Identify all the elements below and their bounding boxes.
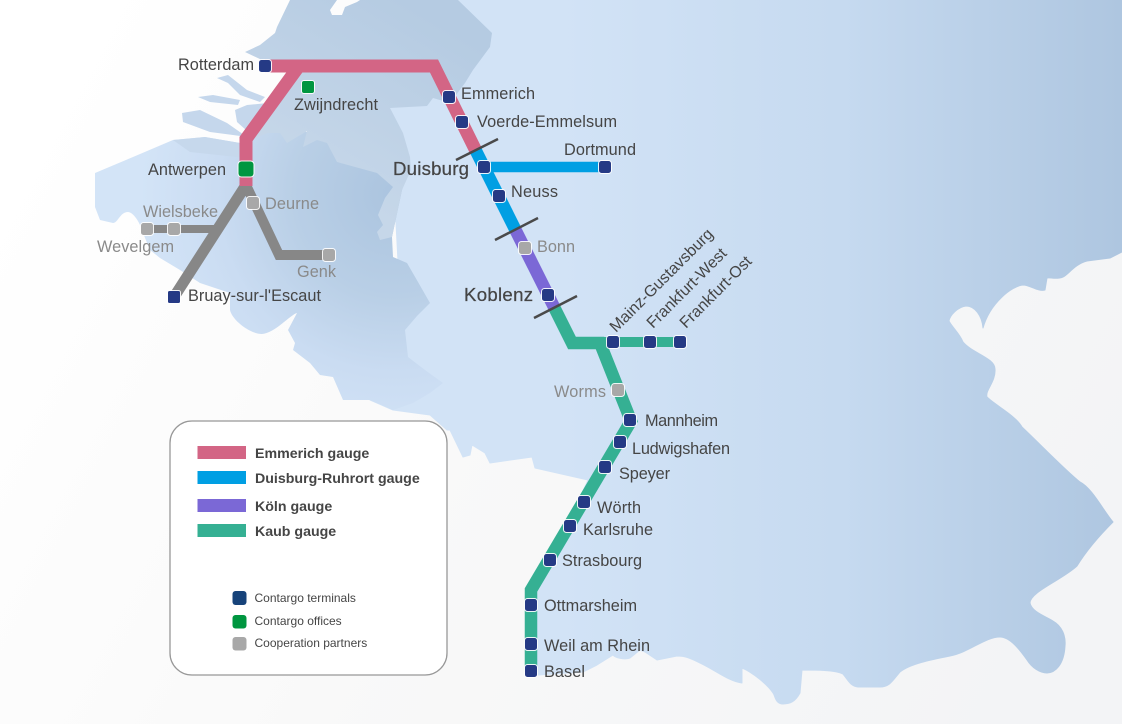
map: Germany (360, 0, 1122, 704)
station: Wielsbeke: Wielsbeke (143, 203, 218, 221)
station: Koblenz: Koblenz (464, 284, 533, 305)
station: Deurne: Deurne (265, 195, 319, 213)
station: Weil am Rhein: Weil am Rhein (544, 637, 650, 655)
station: Dortmund (564, 141, 636, 173)
station: Neuss (493, 183, 558, 202)
station: Ludwigshafen (614, 436, 730, 458)
station: Ottmarsheim: Ottmarsheim (544, 597, 637, 615)
legend panel (170, 421, 447, 675)
station: Wörth (578, 496, 641, 517)
route: Kaub gauge (531, 307, 680, 672)
legend: Duisburg-Ruhrort gauge: Duisburg-Ruhrort gauge (255, 471, 420, 487)
legend: Kaub gauge (198, 524, 336, 540)
map: Zeeland islands (182, 75, 268, 137)
route: Duisburg-Ruhrort gauge (476, 150, 605, 230)
station: Karlsruhe: Karlsruhe (583, 521, 653, 539)
legend: Emmerich gauge: Emmerich gauge (255, 446, 369, 462)
map: Zeeland Flanders strip (173, 137, 246, 158)
station: Genk (297, 249, 337, 281)
station: Dortmund: Dortmund (564, 141, 636, 159)
station: Frankfurt-West: Frankfurt-West (644, 245, 731, 332)
legend: Kaub gauge: Kaub gauge (255, 524, 336, 540)
legend: Köln gauge: Köln gauge (255, 499, 332, 515)
legend: Cooperation partners: Cooperation partners (254, 636, 367, 650)
station: Speyer: Speyer (619, 465, 671, 483)
station: Bruay-sur-l'Escaut: Bruay-sur-l'Escaut (188, 287, 321, 305)
gauge separators (456, 139, 577, 318)
map: Belgium and northern France (95, 125, 443, 410)
legend: Contargo offices: Contargo offices (254, 614, 342, 628)
station: Basel (525, 663, 585, 681)
station: Bonn (519, 238, 575, 256)
station: Genk: Genk (297, 263, 337, 281)
legend: Emmerich gauge (198, 446, 369, 462)
station: Zwijndrecht: Zwijndrecht (294, 96, 378, 114)
station: Duisburg: Duisburg (393, 158, 469, 179)
station: Voerde-Emmelsum: Voerde-Emmelsum (477, 113, 617, 131)
station: Bonn: Bonn (537, 238, 575, 256)
station: Speyer (599, 461, 671, 483)
legend: Contargo terminals: Contargo terminals (254, 591, 356, 605)
station: Antwerpen: Antwerpen (148, 161, 226, 179)
station: Rotterdam: Rotterdam (178, 56, 254, 74)
station: Wevelgem: Wevelgem (97, 238, 174, 256)
station: Zwijndrecht (294, 81, 378, 114)
map: Netherlands (182, 0, 492, 240)
legend: Köln gauge (198, 499, 332, 515)
station: Emmerich: Emmerich (461, 85, 535, 103)
station: Wörth: Wörth (597, 499, 641, 517)
station: Wevelgem (97, 223, 174, 256)
station: Mainz-Gustavsburg: Mainz-Gustavsburg (607, 226, 717, 336)
station: Neuss: Neuss (511, 183, 558, 201)
station: Wielsbeke (143, 203, 218, 235)
station: Frankfurt-Ost: Frankfurt-Ost (677, 253, 756, 332)
station: Worms: Worms (554, 383, 606, 401)
route: Emmerich gauge (246, 66, 476, 186)
station: Mannheim: Mannheim (645, 412, 718, 430)
station: Ludwigshafen: Ludwigshafen (632, 440, 730, 458)
route: Köln gauge (516, 230, 554, 307)
route: grey Belgian network (147, 185, 329, 297)
station: Strasbourg: Strasbourg (562, 552, 642, 570)
station: Basel: Basel (544, 663, 585, 681)
